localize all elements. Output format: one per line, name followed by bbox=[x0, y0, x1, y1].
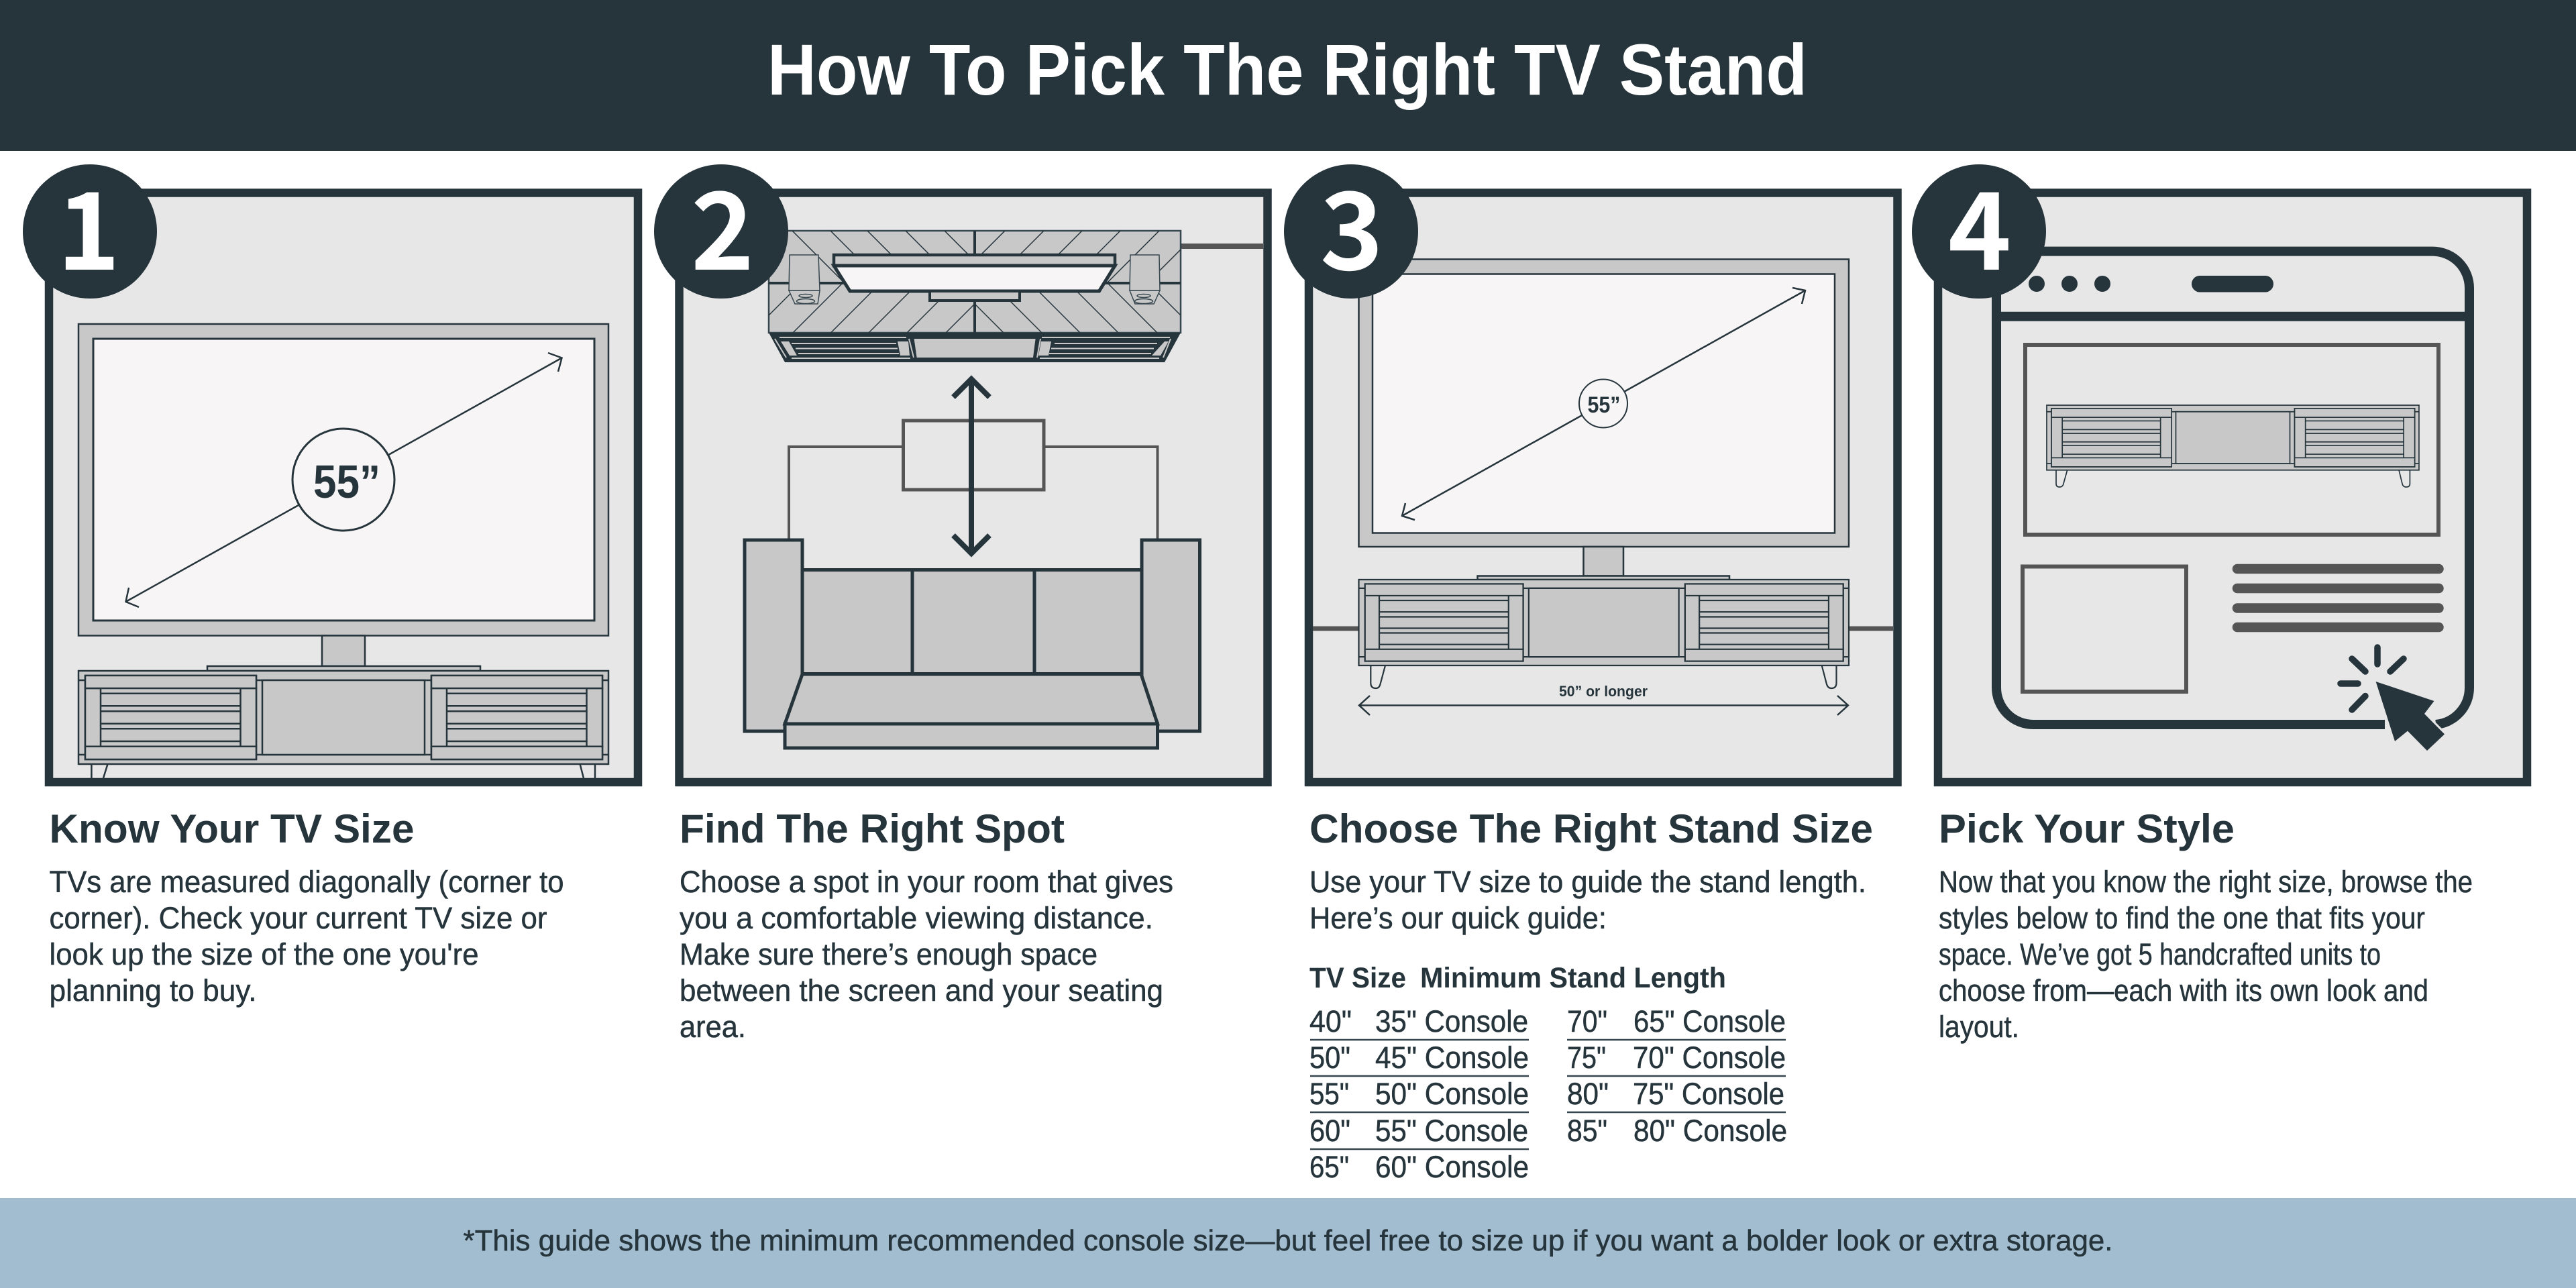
table: minimum stand length: 50" bbox=[1309, 1040, 1350, 1075]
step badge 4 bbox=[1912, 146, 2046, 301]
table: minimum stand length: 55" Console bbox=[1375, 1114, 1528, 1148]
table: minimum stand length: 35" Console bbox=[1375, 1004, 1528, 1038]
callout: 55 inch badge bbox=[1579, 380, 1627, 428]
wall line bbox=[1313, 627, 1893, 631]
heading: step 4: Pick Your Style bbox=[1939, 806, 2235, 851]
label: stand length: 50” or longer bbox=[1559, 683, 1648, 700]
product description lines bbox=[2237, 569, 2439, 627]
heading: step 2: Find The Right Spot bbox=[680, 806, 1065, 851]
heading: step 3: Choose The Right Stand Size bbox=[1309, 806, 1873, 851]
header band bbox=[0, 0, 2576, 151]
text block: step 4 bbox=[1939, 865, 2473, 1044]
table: minimum stand length: 75" Console bbox=[1633, 1077, 1784, 1111]
step badge 3 bbox=[1284, 146, 1418, 301]
callout: 55 inch badge bbox=[292, 429, 394, 531]
table: minimum stand length: 85" bbox=[1567, 1114, 1607, 1148]
step badge 4: 4 bbox=[1948, 146, 2011, 301]
text block: step 4: Now that you know the right size, browse the bbox=[1939, 865, 2473, 899]
product image frame with console bbox=[2025, 345, 2438, 535]
table: minimum stand length bbox=[1309, 962, 1787, 1184]
table: minimum stand length: 60" bbox=[1309, 1114, 1350, 1148]
heading: step 1: Know Your TV Size bbox=[50, 806, 415, 851]
callout: 55 inch badge: 55” bbox=[313, 455, 380, 508]
table: minimum stand length: 70" Console bbox=[1633, 1040, 1786, 1075]
text block: step 3: Here’s our quick guide: bbox=[1309, 901, 1607, 935]
text block: step 2: between the screen and your seating bbox=[680, 973, 1163, 1008]
footnote: *This guide shows the minimum recommended console size—but feel free to size up if you want a bolder look or extra storage. bbox=[463, 1224, 2113, 1257]
table: minimum stand length: 55" bbox=[1309, 1077, 1349, 1111]
text block: step 3 bbox=[1309, 865, 1866, 935]
table: minimum stand length: 50" Console bbox=[1375, 1077, 1529, 1111]
footer band bbox=[0, 1198, 2576, 1288]
arrow: diagonal screen measure bbox=[1402, 288, 1805, 520]
icon: sofa bbox=[745, 540, 1199, 748]
step badge 2: 2 bbox=[691, 146, 754, 301]
text block: step 4: choose from—each with its own look and bbox=[1939, 973, 2428, 1008]
arrow: stand length bbox=[1359, 696, 1848, 715]
icon: top-down TV wall and stand bbox=[769, 231, 1181, 362]
icon: cursor arrow bbox=[2376, 682, 2445, 751]
text block: step 4: space. We’ve got 5 handcrafted units to bbox=[1939, 937, 2381, 971]
text block: step 2: Choose a spot in your room that gives bbox=[680, 865, 1173, 899]
panel 2: find the right spot bbox=[679, 193, 1268, 782]
step badge 1 bbox=[23, 146, 157, 301]
icon: click sparks bbox=[2341, 647, 2404, 710]
arrow: diagonal screen measure bbox=[126, 353, 562, 607]
table: minimum stand length: Minimum Stand Length bbox=[1420, 962, 1726, 994]
table: minimum stand length: TV Size bbox=[1309, 962, 1406, 994]
icon: coffee table and side lines bbox=[789, 421, 1158, 540]
panel 3: choose the right stand size bbox=[1309, 193, 1897, 782]
step badge 1: 1 bbox=[57, 146, 120, 301]
text block: step 2: you a comfortable viewing distance. bbox=[680, 901, 1153, 935]
arrow: viewing distance bbox=[953, 379, 989, 553]
table: minimum stand length: 75" bbox=[1567, 1040, 1606, 1075]
text block: step 1: planning to buy. bbox=[50, 973, 256, 1008]
icon: television on console bbox=[1359, 259, 1849, 688]
icon: television on console bbox=[78, 324, 608, 778]
thumbnail frame bbox=[2023, 566, 2186, 692]
text block: step 1: look up the size of the one you're bbox=[50, 937, 479, 971]
icon: right speaker bbox=[1130, 255, 1160, 304]
table: minimum stand length: 80" bbox=[1567, 1077, 1609, 1111]
text block: step 3: Use your TV size to guide the stand length. bbox=[1309, 865, 1866, 899]
wall line bbox=[1179, 244, 1263, 249]
title: How To Pick The Right TV Stand bbox=[767, 29, 1807, 110]
text block: step 1: TVs are measured diagonally (corner to bbox=[50, 865, 564, 899]
text block: step 1: corner). Check your current TV size or bbox=[50, 901, 547, 935]
table: minimum stand length: 40" bbox=[1309, 1004, 1352, 1038]
text block: step 2: area. bbox=[680, 1010, 746, 1044]
table: minimum stand length: 60" Console bbox=[1375, 1150, 1529, 1184]
table: minimum stand length: 45" Console bbox=[1375, 1040, 1529, 1075]
text block: step 1 bbox=[50, 865, 564, 1008]
icon: browser window bbox=[1996, 252, 2469, 724]
step badge 2 bbox=[654, 146, 788, 301]
icon: left speaker bbox=[789, 255, 820, 304]
panel 4: pick your style bbox=[1938, 193, 2527, 782]
step badge 3: 3 bbox=[1320, 146, 1383, 301]
text block: step 4: styles below to find the one that fits your bbox=[1939, 901, 2425, 935]
text block: step 2 bbox=[680, 865, 1173, 1044]
panel 1: know your TV size bbox=[49, 193, 638, 782]
table: minimum stand length: 80" Console bbox=[1633, 1114, 1787, 1148]
table: minimum stand length: 70" bbox=[1567, 1004, 1607, 1038]
text block: step 4: layout. bbox=[1939, 1010, 2019, 1044]
text block: step 2: Make sure there’s enough space bbox=[680, 937, 1097, 971]
callout: 55 inch badge: 55” bbox=[1587, 392, 1621, 418]
table: minimum stand length: 65" bbox=[1309, 1150, 1349, 1184]
table: minimum stand length: 65" Console bbox=[1633, 1004, 1786, 1038]
